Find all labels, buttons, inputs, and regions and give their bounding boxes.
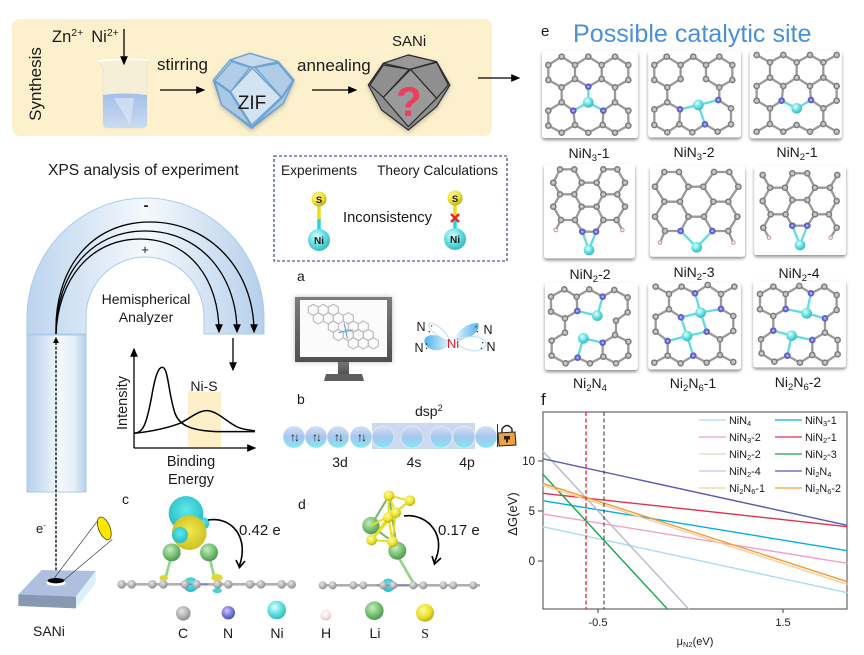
labels: catalytic site names: -1	[597, 145, 610, 161]
legend: catalytic sites: NiN	[729, 432, 747, 444]
icon: beaker	[98, 59, 149, 128]
arrow head: charge transfer d	[432, 556, 441, 564]
labels: catalytic site names: -1	[805, 144, 818, 160]
legend: atoms: Ni	[270, 625, 284, 641]
text: metal ions: 2+	[71, 27, 83, 39]
legend: catalytic sites: NiN	[805, 415, 823, 427]
labels: catalytic site names: 2	[697, 272, 702, 283]
panel: NiN3-2	[648, 51, 741, 137]
diagram: hemispherical analyzer	[27, 197, 264, 492]
legend: catalytic sites: 2	[739, 487, 743, 496]
diagram: hemispherical analyzer: -	[144, 197, 148, 214]
legend: catalytic sites: 2	[823, 436, 827, 445]
chart: XPS spectrum: Binding	[167, 454, 215, 470]
molecule: charge density d	[319, 490, 480, 592]
label: c: c	[122, 491, 129, 507]
legend: catalytic sites: 2	[815, 487, 819, 496]
diagram: electron orbital boxes: ↑↓	[290, 430, 299, 444]
illustration: X-ray source and sample: e	[36, 521, 43, 536]
legend: catalytic sites: -1	[827, 415, 837, 427]
icon: broken Ni-S bond: S	[452, 194, 458, 205]
chart: XPS spectrum: Ni-S	[190, 378, 218, 394]
panel: NiN2-2	[544, 164, 635, 258]
diagram: electron orbital boxes: 4s	[407, 454, 421, 470]
labels: catalytic site names: -3	[702, 264, 715, 280]
legend: catalytic sites: -2	[751, 449, 761, 461]
chart: free energy lines: 0	[529, 556, 535, 568]
icon: Ni-S bond: Ni	[314, 236, 324, 247]
legend: catalytic sites: N	[819, 466, 827, 478]
legend: catalytic sites: 2	[747, 470, 751, 479]
diagram: electron orbital boxes: ↑↓	[312, 430, 321, 444]
legend: catalytic sites: NiN	[805, 449, 823, 461]
callout: inconsistency box: Theory Calculations	[377, 163, 498, 178]
icon: question mark: ?	[396, 78, 422, 125]
labels: catalytic site names: 6	[803, 382, 809, 393]
icon: computer monitor	[295, 297, 392, 381]
labels: catalytic site names: NiN	[673, 144, 697, 160]
icon: padlock	[498, 424, 516, 447]
labels: catalytic site names: NiN	[673, 264, 697, 280]
labels: catalytic site names: 3	[697, 152, 702, 163]
heading: Synthesis: Synthesis	[26, 47, 45, 121]
label: b: b	[297, 391, 305, 407]
labels: catalytic site names: -4	[807, 265, 820, 281]
panel: Ni2N4	[545, 283, 638, 370]
labels: catalytic site names: Ni	[775, 374, 788, 390]
chart: XPS spectrum: Intensity	[115, 375, 131, 430]
legend: catalytic sites: N	[743, 483, 751, 495]
icon: ZIF crystal	[213, 53, 294, 128]
diagram: hemispherical analyzer: Hemispherical	[102, 291, 190, 307]
labels: catalytic site names: 6	[698, 383, 704, 394]
legend: catalytic sites: 3	[823, 419, 827, 428]
legend: catalytic sites: Ni	[805, 483, 815, 495]
panel: NiN2-4	[754, 166, 846, 255]
arrow: to spectrum	[232, 338, 234, 370]
legend: atoms: H	[321, 625, 331, 641]
labels: catalytic site names: N	[793, 374, 803, 390]
labels: catalytic site names: 2	[788, 382, 793, 393]
labels: catalytic site names: 2	[586, 383, 592, 394]
chart: free energy lines: (eV)	[693, 636, 713, 648]
diagram: electron orbital boxes: 3d	[332, 454, 348, 470]
labels: catalytic site names: NiN	[569, 266, 593, 282]
arrow: charge transfer d	[404, 516, 439, 563]
legend: catalytic sites	[699, 415, 841, 496]
icon: SANi crystal	[368, 55, 450, 130]
heading: XPS analysis: XPS analysis of experiment	[48, 162, 239, 179]
labels: catalytic site names: 3	[592, 153, 597, 164]
icon: broken Ni-S bond: Ni	[450, 235, 460, 246]
labels: catalytic site names: N	[688, 375, 698, 391]
label: e: e	[541, 23, 549, 40]
labels: catalytic site names: Ni	[573, 375, 586, 391]
arrow: into beaker	[123, 29, 125, 64]
text: metal ions: Ni	[91, 28, 107, 46]
legend: catalytic sites: Ni	[805, 466, 815, 478]
labels: catalytic site names: -2	[809, 374, 821, 390]
legend: catalytic sites: -2	[831, 483, 841, 495]
legend: atoms	[176, 601, 434, 642]
text: 0.17 e: 0.17 e	[438, 522, 480, 539]
diagram: Ni-N orbitals	[414, 320, 496, 355]
panel: synthesis	[12, 19, 492, 136]
diagram: Ni-N orbitals: N	[483, 323, 493, 337]
diagram: hemispherical analyzer: Analyzer	[119, 309, 174, 325]
diagram: electron orbital boxes: 4p	[459, 454, 475, 470]
illustration: X-ray source and sample	[18, 337, 114, 639]
chart: free energy lines: 1.5	[775, 617, 791, 629]
chart: free energy lines: -0.5	[589, 617, 607, 629]
legend: catalytic sites: -2	[751, 432, 761, 444]
illustration: X-ray source and sample: SANi	[33, 623, 65, 639]
molecule: charge density c	[117, 496, 296, 593]
labels: catalytic site names	[568, 144, 821, 394]
legend: catalytic sites: -1	[827, 432, 837, 444]
diagram: Ni-N orbitals: Ni	[447, 336, 459, 351]
legend: catalytic sites: 2	[815, 470, 819, 479]
arrow: stirring	[160, 89, 204, 91]
legend: catalytic sites: 4	[827, 470, 831, 479]
legend: catalytic sites: 2	[747, 453, 751, 462]
icon: Ni-S bond	[308, 192, 330, 251]
legend: catalytic sites: NiN	[729, 449, 747, 461]
text: metal ions: 2+	[107, 27, 119, 39]
diagram: Ni-N orbitals: N	[414, 341, 424, 355]
labels: catalytic site names: N	[592, 375, 602, 391]
panel: Ni2N6-2	[753, 281, 846, 367]
legend: catalytic sites: 3	[747, 436, 751, 445]
chart: XPS spectrum	[115, 349, 255, 488]
legend: atoms: N	[223, 625, 233, 641]
chart: free energy lines	[505, 412, 847, 649]
text: dsp2: 2	[438, 403, 443, 413]
arrow: to catalytic sites	[478, 77, 519, 79]
illustration: X-ray source and sample: -	[43, 521, 46, 530]
labels: catalytic site names: 4	[602, 383, 607, 394]
callout: inconsistency box: Inconsistency	[343, 210, 433, 226]
legend: catalytic sites: -1	[755, 483, 765, 495]
chart: free energy lines: N2	[683, 640, 693, 649]
labels: catalytic site names: -2	[702, 144, 715, 160]
labels: catalytic site names: -1	[704, 375, 716, 391]
legend: atoms: S	[421, 627, 429, 642]
labels: catalytic site names: NiN	[778, 265, 802, 281]
labels: catalytic site names: -2	[598, 266, 611, 282]
text: ZIF: ZIF	[238, 93, 266, 114]
legend: atoms: Li	[370, 625, 380, 641]
callout: inconsistency box: Experiments	[281, 163, 357, 178]
diagram: Ni-N orbitals: N	[486, 340, 496, 354]
legend: catalytic sites: 6	[751, 487, 755, 496]
label: d: d	[298, 496, 306, 512]
legend: catalytic sites: 2	[823, 453, 827, 462]
legend: catalytic sites: 6	[827, 487, 831, 496]
labels: catalytic site names: 2	[683, 383, 688, 394]
panel: NiN3-1	[542, 51, 638, 138]
legend: atoms: C	[178, 625, 188, 641]
text: 0.42 e: 0.42 e	[239, 522, 281, 539]
legend: catalytic sites: -3	[827, 449, 837, 461]
text: stirring: stirring	[157, 55, 208, 74]
text: dsp2: dsp	[415, 403, 438, 419]
label: f: f	[541, 390, 546, 409]
legend: catalytic sites: 4	[747, 419, 751, 428]
text: metal ions: Zn	[52, 28, 71, 46]
arrow head: charge transfer c	[236, 560, 245, 568]
diagram: electron orbital boxes: ↑↓	[334, 430, 343, 444]
chart: XPS spectrum: Energy	[168, 472, 215, 488]
labels: catalytic site names: NiN	[568, 145, 592, 161]
arrow: charge transfer c	[208, 520, 242, 567]
panel: NiN2-1	[750, 51, 842, 138]
chart: free energy lines: 5	[529, 506, 535, 518]
diagram: Ni-N orbitals: N	[416, 320, 426, 334]
legend: catalytic sites: Ni	[729, 483, 739, 495]
icon: Ni-S bond: S	[316, 195, 322, 206]
legend: catalytic sites: N	[819, 483, 827, 495]
labels: catalytic site names: 2	[800, 152, 805, 163]
chart: free energy lines: ΔG(eV)	[505, 492, 520, 536]
callout: inconsistency box	[274, 156, 507, 261]
legend: catalytic sites: NiN	[729, 466, 747, 478]
panel: NiN2-3	[650, 166, 745, 257]
chart: free energy lines: 10	[522, 456, 535, 468]
heading: possible catalytic site: Possible catalytic site	[573, 20, 812, 48]
text: SANi: SANi	[392, 33, 426, 50]
chart: free energy lines: μ	[677, 636, 683, 648]
legend: catalytic sites: NiN	[805, 432, 823, 444]
labels: catalytic site names: NiN	[776, 144, 800, 160]
labels: catalytic site names: Ni	[670, 375, 683, 391]
icon: broken Ni-S bond	[444, 190, 466, 250]
diagram: electron orbital boxes	[283, 423, 497, 470]
labels: catalytic site names: 2	[802, 273, 807, 284]
diagram: electron orbital boxes: ↑↓	[357, 430, 366, 444]
panel: Ni2N6-1	[648, 283, 741, 369]
labels: catalytic site names: 2	[593, 274, 598, 285]
arrow: annealing	[312, 89, 356, 91]
legend: catalytic sites: -4	[751, 466, 761, 478]
legend: catalytic sites: NiN	[729, 415, 747, 427]
text: annealing: annealing	[297, 56, 371, 75]
diagram: hemispherical analyzer: +	[141, 242, 149, 257]
label: a: a	[297, 268, 305, 284]
